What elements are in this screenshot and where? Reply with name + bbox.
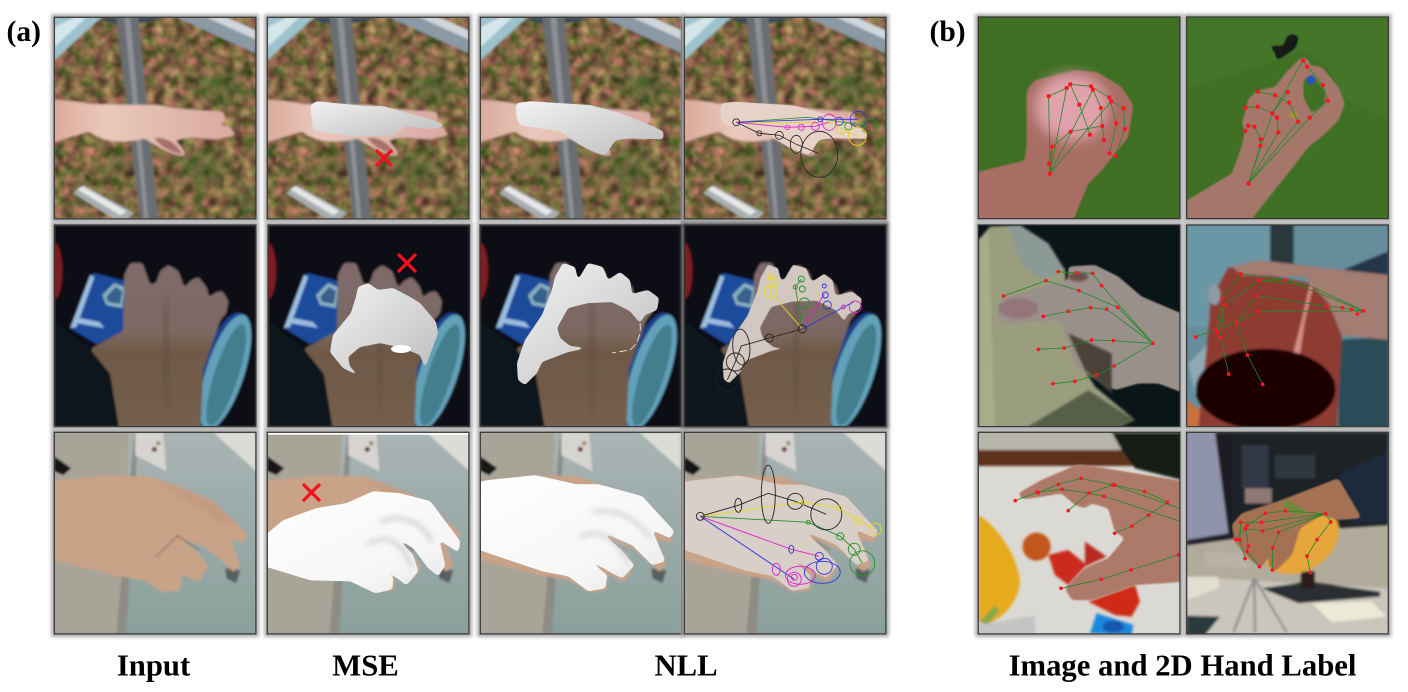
panel: MSE row 1 <box>262 14 480 222</box>
2D keypoints 3 <box>1002 270 1155 385</box>
panel: MSE row 2 <box>260 222 476 437</box>
icon: red cross MSE row 2 <box>398 254 416 272</box>
2D keypoints 5 <box>1013 476 1182 590</box>
panel: NLL uncertainty row 2 <box>676 222 892 437</box>
label: (a): (a) <box>6 16 41 48</box>
2D keypoints 2 <box>1243 58 1330 186</box>
label: (b): (b) <box>930 16 966 48</box>
caption: Image and 2D Hand Label: Image and 2D Hand Label <box>1009 648 1356 682</box>
icon: red cross MSE row 1 <box>376 150 392 166</box>
panel: label image 5 toys on table <box>975 425 1188 638</box>
panel: input row 2 <box>46 222 262 437</box>
panel: NLL mesh row 2 <box>472 222 688 437</box>
panel: MSE row 3 <box>261 429 472 637</box>
icon: red cross MSE row 3 <box>303 484 320 501</box>
caption: Input: Input <box>117 648 191 682</box>
panel: label image 1 green screen fist <box>972 10 1188 224</box>
caption: MSE: MSE <box>332 648 399 682</box>
2D keypoints 6 <box>1234 509 1333 574</box>
panel: input row 1 <box>49 14 267 222</box>
panel: label image 4 red cup <box>1184 222 1392 430</box>
uncertainty ellipses row 1 <box>733 111 877 177</box>
panel: label image 2 green screen pinch <box>1182 14 1392 224</box>
2D keypoints 4 <box>1194 272 1366 386</box>
panel: NLL uncertainty row 1 <box>679 14 897 222</box>
panel: label image 6 orange and monitor <box>1184 429 1392 637</box>
uncertainty ellipses row 2 <box>716 274 861 391</box>
2D keypoints 1 <box>1046 82 1127 176</box>
panel: input row 3 <box>48 429 259 637</box>
uncertainty ellipses row 3 <box>696 465 881 586</box>
panel: label image 3 wooden block <box>975 220 1188 433</box>
panel: NLL mesh row 1 <box>475 14 693 222</box>
caption: NLL: NLL <box>654 648 718 682</box>
panel: NLL mesh row 3 <box>474 429 685 637</box>
panel: NLL uncertainty row 3 <box>678 429 889 637</box>
